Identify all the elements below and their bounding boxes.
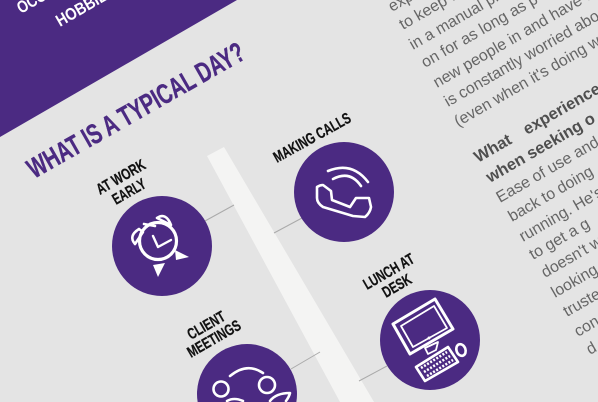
icon: alarm clock: [132, 216, 189, 277]
subheading: what experience: [471, 80, 598, 187]
step: client meetings: [184, 308, 297, 402]
label: at work early: [94, 156, 150, 208]
icon: computer: [393, 299, 467, 381]
icon: people: [214, 368, 290, 401]
subheading: what experience: when seeking o: [482, 109, 598, 187]
step: making calls: [271, 110, 394, 242]
body text: lower paragraph: back to doing: [506, 163, 596, 225]
body text: top paragraph: [386, 0, 598, 130]
body text: top paragraph: is constantly worried abo: [442, 8, 598, 110]
step: at work early: [94, 156, 212, 296]
label: making calls: MAKING CALLS: [271, 110, 354, 166]
purple header band: [0, 0, 237, 137]
subheading: what experience: What: [471, 130, 515, 166]
icon: telephone: [317, 168, 371, 217]
label: lunch at desk: LUNCH AT: [360, 251, 418, 293]
label: lunch at desk: DESK: [380, 271, 415, 301]
connector lines: [205, 205, 387, 381]
step: lunch at desk: [360, 251, 480, 390]
body text: lower paragraph: [494, 134, 598, 358]
label: lunch at desk: [360, 251, 418, 301]
label: client meetings: MEETINGS: [184, 317, 244, 361]
label: at work early: EARLY: [110, 176, 150, 208]
body text: lower paragraph: to get a g: [526, 215, 593, 263]
timeline bar: [207, 147, 374, 402]
label: at work early: AT WORK: [94, 156, 149, 198]
label: client meetings: CLIENT: [184, 308, 229, 343]
